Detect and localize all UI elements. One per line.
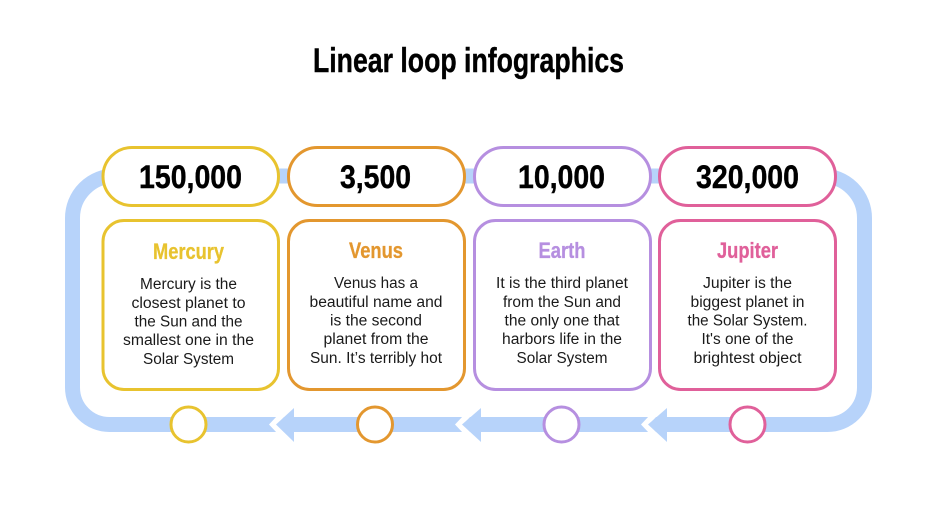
number pill: Earth [474,148,650,206]
node: Jupiter [730,407,765,442]
loop track [72,176,864,424]
card: Earth: Solar System [516,350,608,367]
card: Venus: beautiful name and [310,294,442,311]
card: Earth: harbors life in the [502,331,622,348]
card: Mercury [103,220,278,390]
card: Venus [288,220,464,390]
panel: Venus [288,148,464,442]
number pill: Jupiter: 320,000 [696,159,799,195]
panel: Jupiter [660,148,836,442]
number pill: Mercury [103,148,278,206]
card: Earth: from the Sun and [503,294,621,311]
card: Venus: Venus has a [334,275,418,292]
card: Jupiter: It's one of the [702,331,794,348]
arrow: Earth to Venus [455,408,481,442]
card: Jupiter: brightest object [694,350,802,367]
card: Jupiter [660,220,836,390]
card: Earth: the only one that [504,312,620,330]
title: Linear loop infographics [313,42,624,80]
number pill: Earth: 10,000 [518,159,605,195]
card: Jupiter: biggest planet in [690,294,804,311]
card: Earth: It is the third planet [496,275,629,292]
arrow: Venus to Mercury [269,408,294,442]
card: Earth [474,220,650,390]
card: Mercury: Solar System [143,351,234,368]
card: Jupiter: the Solar System. [688,312,808,330]
node: Earth [544,407,579,442]
card: Mercury: closest planet to [132,295,246,312]
panel: Earth [474,148,650,442]
number pill: Jupiter [660,148,836,206]
card: Earth: Earth [538,238,586,263]
number pill: Mercury: 150,000 [139,159,242,195]
card: Venus: Venus [349,238,403,263]
number pill: Venus: 3,500 [340,159,411,195]
node: Venus [358,407,392,442]
card: Venus: Sun. It’s terribly hot [310,350,443,367]
node: Mercury [171,407,206,442]
card: Mercury: Mercury [153,239,225,264]
card: Venus: planet from the [324,331,428,348]
card: Jupiter: Jupiter is the [703,275,792,292]
arrow: Jupiter to Earth [641,408,667,442]
panel: Mercury [103,148,278,442]
number pill: Venus [288,148,464,206]
card: Jupiter: Jupiter [717,238,778,263]
card: Mercury: smallest one in the [123,332,254,349]
card: Venus: is the second [330,312,422,330]
card: Mercury: the Sun and the [134,314,242,330]
card: Mercury: Mercury is the [140,276,237,293]
